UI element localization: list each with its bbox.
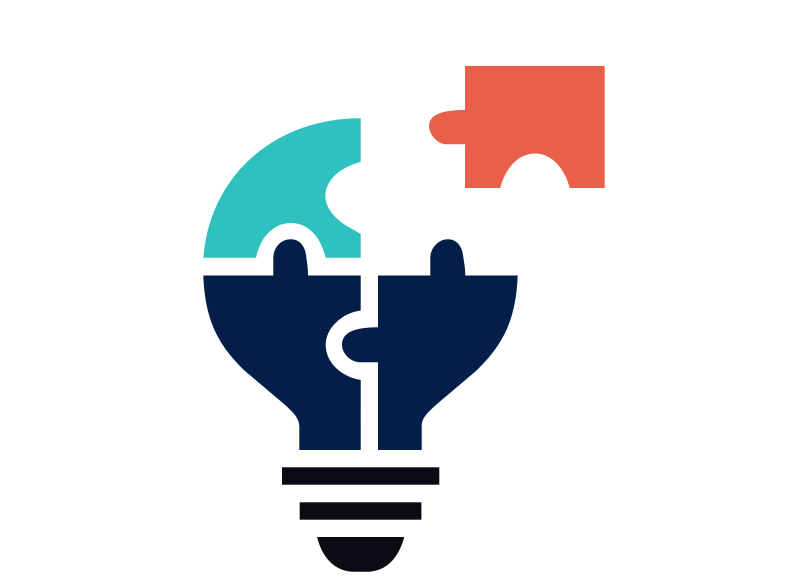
- puzzle piece: teal top-left: [203, 118, 361, 258]
- puzzle piece: coral detached: [429, 66, 605, 188]
- bulb base: upper bar: [282, 467, 439, 485]
- puzzle piece: navy bottom-right: [342, 239, 518, 450]
- bulb base: bottom cap: [317, 537, 404, 572]
- bulb base: middle bar: [300, 502, 421, 520]
- puzzle piece: navy bottom-left: [203, 239, 361, 450]
